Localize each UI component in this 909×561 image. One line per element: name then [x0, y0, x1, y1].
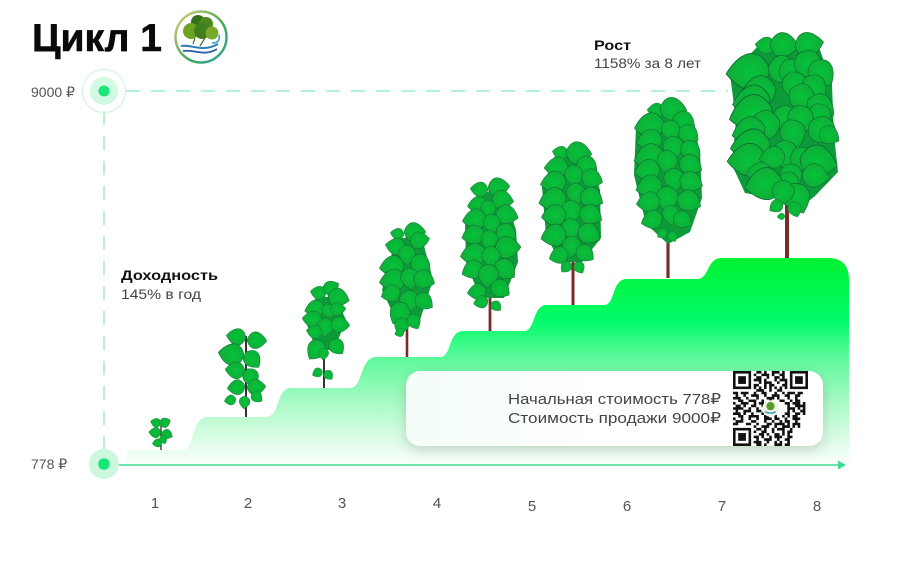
x axis year labels: 1: [151, 495, 159, 512]
QR code: [733, 372, 807, 445]
marker: 778 point: [89, 449, 119, 479]
title: Цикл 1: [32, 17, 162, 60]
plant year 1: [148, 416, 175, 450]
text: yield: Доходность: [121, 267, 218, 283]
x axis year labels: [151, 495, 821, 515]
x axis year labels: 7: [718, 498, 726, 515]
label: 9000 ₽: 9000 ₽: [31, 84, 75, 100]
plant year 5: [458, 177, 521, 331]
panel: cost card: [406, 371, 823, 446]
plant year 8: [725, 30, 844, 258]
text: yield: 145% в год: [121, 286, 201, 302]
x axis arrow: [104, 460, 846, 470]
x axis year labels: 8: [813, 498, 821, 515]
card text: initial and sale price: Начальная стоимость 778₽: [508, 391, 721, 408]
x axis year labels: 4: [433, 495, 441, 512]
card text: initial and sale price: [508, 391, 722, 427]
x axis year labels: 2: [244, 495, 252, 512]
x axis year labels: 6: [623, 498, 631, 515]
marker: 9000 point: [82, 70, 126, 112]
text: growth: 1158% за 8 лет: [594, 55, 702, 71]
icon: round tree and water logo: [176, 12, 226, 62]
y axis: dashed vertical guide: [103, 111, 105, 450]
plant year 2: [217, 327, 267, 417]
plant year 4: [378, 223, 438, 357]
card text: initial and sale price: Стоимость продажи 9000₽: [508, 410, 722, 427]
text: yield: [121, 267, 218, 302]
label: 778 ₽: 778 ₽: [31, 456, 67, 472]
x axis year labels: 3: [338, 495, 346, 512]
plant year 6: [536, 141, 607, 305]
x axis year labels: 5: [528, 498, 536, 515]
top level dashed guide: [126, 90, 728, 92]
text: growth: Рост: [594, 37, 631, 53]
plant year 7: [631, 96, 706, 278]
plant year 3: [301, 277, 352, 388]
text: growth: [594, 37, 702, 71]
stepped green area: [126, 258, 849, 465]
